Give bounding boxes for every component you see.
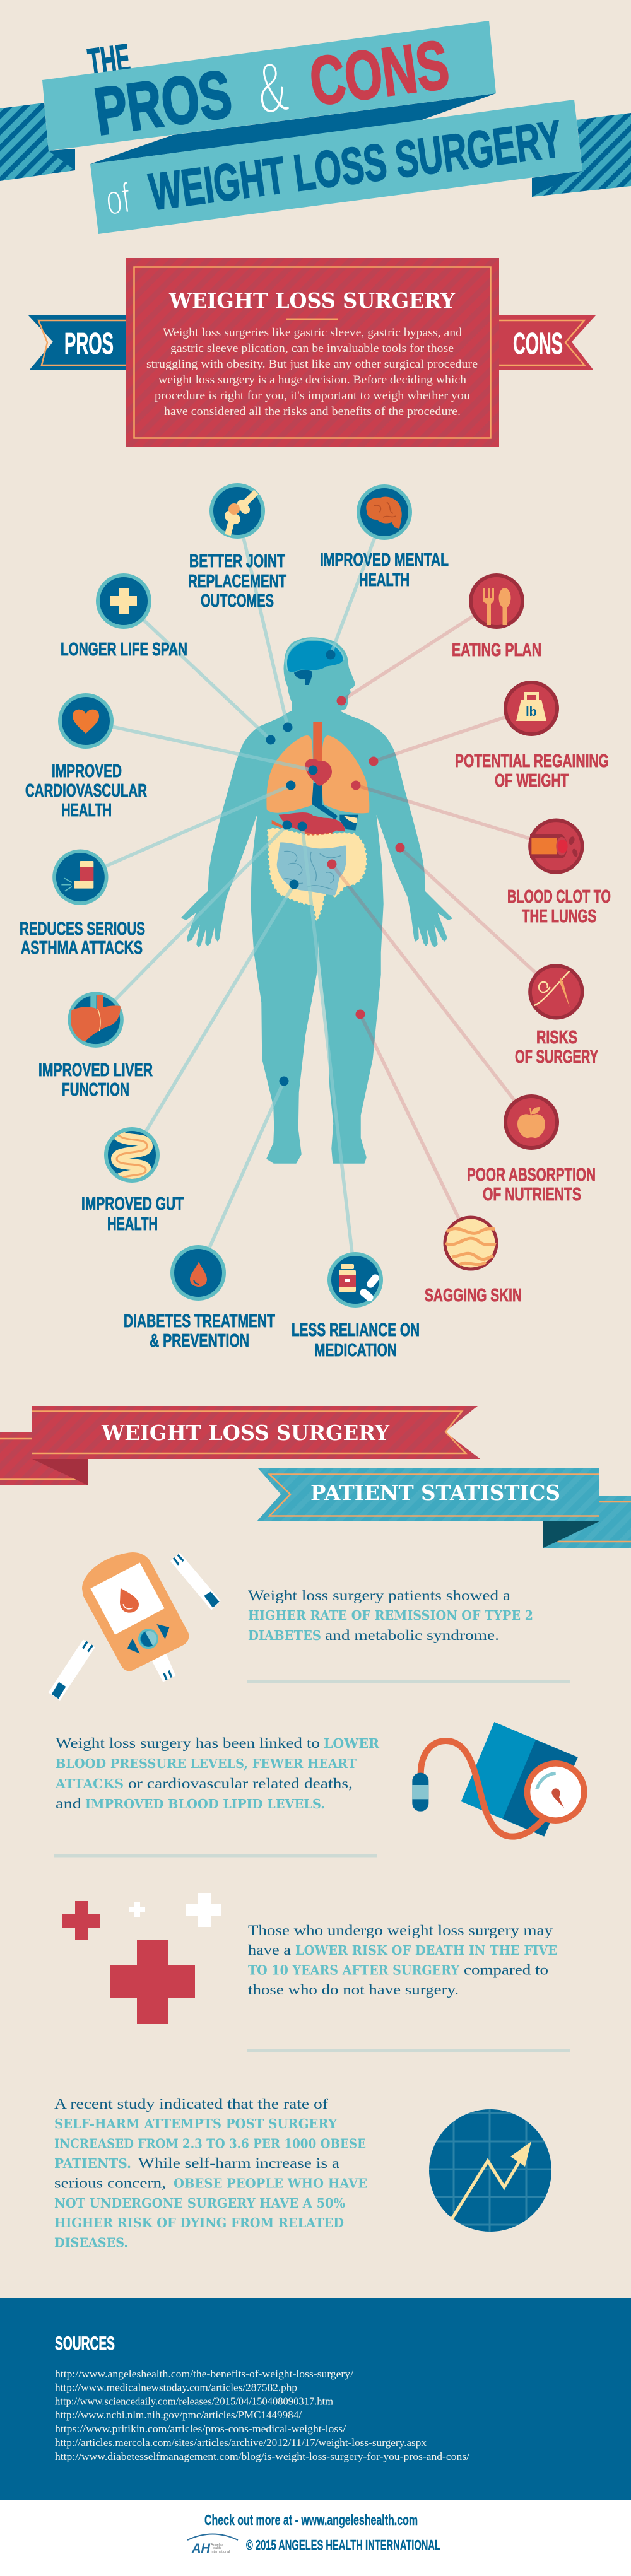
text: self-harm: While self-harm increase is a — [138, 2155, 339, 2171]
label: diabetes: DIABETES TREATMENT — [124, 1311, 275, 1332]
label: regaining weight — [455, 751, 609, 791]
large intestine — [268, 829, 366, 921]
striped ribbon tail right — [532, 113, 631, 197]
connector lines: pros — [81, 511, 384, 1280]
intro text: Weight loss surgeries like gastric sleeve, gastric bypass, and — [163, 326, 463, 339]
icon: sagging skin — [445, 1217, 497, 1269]
intro text: struggling with obesity. But just like any other surgical procedure — [146, 358, 478, 371]
label: sagging skin: SAGGING SKIN — [425, 1285, 522, 1306]
label: joint: BETTER JOINT — [189, 551, 285, 571]
logo: AH — [191, 2541, 211, 2556]
banner: weight loss surgery: WEIGHT LOSS SURGERY — [101, 1420, 389, 1445]
label: blood clot: THE LUNGS — [522, 906, 596, 927]
heading: Cons: CONS — [305, 26, 453, 120]
label: eating plan: EATING PLAN — [452, 640, 541, 660]
sources list: http://www.ncbi.nlm.nih.gov/pmc/articles/PMC1449984/ — [55, 2409, 302, 2421]
icon: blood drop — [172, 1247, 224, 1299]
text: remission — [248, 1588, 533, 1643]
text: risk of death: LOWER RISK OF DEATH IN THE FIVE — [295, 1943, 557, 1958]
icon: joint — [211, 485, 263, 537]
icon: apple — [505, 1096, 557, 1148]
top ribbon — [42, 21, 496, 151]
text: blood pressure: Weight loss surgery has been linked to — [56, 1735, 320, 1751]
banner: weight loss surgery — [0, 1406, 480, 1485]
label: liver: IMPROVED LIVER — [38, 1060, 153, 1080]
text: self-harm: A recent study indicated that the rate of — [54, 2096, 328, 2112]
text: remission: HIGHER RATE OF REMISSION OF TYPE 2 — [248, 1608, 533, 1623]
labels: pros — [20, 550, 449, 1361]
label: regaining weight: OF WEIGHT — [495, 771, 569, 791]
icon: blood pressure cuff — [412, 1722, 587, 1837]
icon: medical cross — [98, 575, 150, 627]
sources list: http://www.sciencedaily.com/releases/2015/04/150408090317.htm — [55, 2396, 333, 2408]
label: cardiovascular: IMPROVED — [52, 761, 122, 782]
sources list: http://www.diabetesselfmanagement.com/blog/is-weight-loss-surgery-for-you-pros-and-cons/ — [55, 2450, 469, 2462]
text: remission: Weight loss surgery patients showed a — [248, 1588, 510, 1603]
label: liver: FUNCTION — [62, 1080, 129, 1100]
logo: Health — [211, 2546, 221, 2550]
icon: brain — [358, 486, 410, 538]
heading: Pros: PROS — [90, 57, 236, 149]
text: risk of death: Those who undergo weight loss surgery may — [248, 1923, 553, 1938]
logo: Angeles — [211, 2543, 223, 2547]
icon: gut — [106, 1129, 158, 1181]
label: mental health — [320, 550, 449, 590]
pros ribbon — [28, 315, 127, 370]
banner: patient statistics — [257, 1468, 631, 1548]
label: diabetes — [124, 1311, 275, 1351]
label: risks — [515, 1027, 598, 1067]
label: joint: OUTCOMES — [201, 591, 274, 611]
text: blood pressure: and — [56, 1796, 82, 1812]
text: self-harm: DISEASES. — [54, 2235, 128, 2251]
icon: weight — [505, 682, 557, 734]
intro text — [146, 326, 478, 418]
trachea — [313, 722, 322, 761]
icon: medication — [329, 1254, 381, 1306]
label: medication — [292, 1320, 420, 1361]
text: blood pressure: BLOOD PRESSURE LEVELS, FEWER HEART — [56, 1756, 357, 1771]
body silhouette — [182, 638, 452, 1163]
vessels — [312, 783, 358, 831]
copyright: © 2015 ANGELES HEALTH INTERNATIONAL — [246, 2537, 440, 2553]
text: self-harm: PATIENTS. — [54, 2156, 131, 2171]
label: medication: MEDICATION — [314, 1340, 397, 1361]
sources list: http://articles.mercola.com/sites/articles/archive/2012/11/17/weight-loss-surgery.aspx — [55, 2437, 427, 2449]
sources heading: SOURCES — [55, 2333, 115, 2354]
label: blood clot — [507, 887, 611, 927]
label: mental health: HEALTH — [359, 570, 410, 590]
text: self-harm: serious concern, — [54, 2175, 166, 2191]
label: medication: LESS RELIANCE ON — [292, 1320, 420, 1340]
heading: ampersand: & — [252, 46, 293, 130]
cons ribbon: CONS — [513, 327, 563, 361]
label: life span: LONGER LIFE SPAN — [61, 640, 187, 660]
logo — [187, 2534, 238, 2556]
icon: rising chart — [426, 2107, 555, 2233]
small intestine — [278, 843, 346, 894]
text: blood pressure: LOWER — [324, 1736, 380, 1751]
text: self-harm: NOT UNDERGONE SURGERY HAVE A 50% — [54, 2196, 345, 2211]
banner: patient statistics: PATIENT STATISTICS — [310, 1480, 560, 1505]
label: asthma: REDUCES SERIOUS — [20, 919, 145, 939]
text: self-harm: HIGHER RISK OF DYING FROM RELATED — [54, 2215, 344, 2230]
footer link: Check out more at - www.angeleshealth.com — [204, 2512, 418, 2528]
text: blood pressure — [55, 1735, 380, 1812]
dots: cons — [327, 696, 405, 1019]
text: risk of death — [248, 1923, 557, 1998]
label: gut: IMPROVED GUT — [81, 1194, 184, 1214]
label: risks: RISKS — [536, 1027, 577, 1048]
text: risk of death: have a — [248, 1942, 291, 1958]
icon: suture needle — [530, 966, 582, 1018]
internal organs — [266, 639, 369, 921]
icon: fork and spoon — [471, 575, 522, 627]
heading: The: THE — [85, 35, 133, 86]
connector lines: cons — [332, 601, 556, 1243]
ribbon fold — [90, 93, 496, 164]
text: remission: and metabolic syndrome. — [325, 1627, 499, 1643]
striped ribbon tail left — [0, 103, 75, 181]
label: cardiovascular — [25, 761, 147, 821]
dots: pros — [266, 650, 336, 1086]
text: risk of death: those who do not have surgery. — [248, 1982, 459, 1998]
label: nutrients — [467, 1165, 596, 1205]
label: cardiovascular: HEALTH — [61, 800, 112, 821]
intro text: procedure is right for you, it's important to weigh whether you — [155, 389, 471, 402]
intro heading: WEIGHT LOSS SURGERY — [168, 288, 455, 313]
icon: glucose meter — [49, 1552, 221, 1701]
sources list — [55, 2368, 469, 2462]
stomach — [272, 820, 333, 836]
pros ribbon: PROS — [64, 327, 114, 361]
text: risk of death: compared to — [464, 1962, 548, 1978]
label: mental health: IMPROVED MENTAL — [320, 550, 449, 570]
label: gut: HEALTH — [107, 1214, 158, 1234]
label: asthma: ASTHMA ATTACKS — [21, 938, 143, 958]
text: blood pressure: ATTACKS — [55, 1776, 124, 1791]
icon: heart — [60, 695, 112, 747]
heading: of: of — [103, 174, 133, 225]
panel: sources — [0, 2298, 631, 2500]
heart — [305, 759, 332, 786]
label: diabetes: & PREVENTION — [150, 1331, 249, 1351]
text: self-harm: OBESE PEOPLE WHO HAVE — [174, 2176, 367, 2191]
text: risk of death: TO 10 YEARS AFTER SURGERY — [248, 1963, 459, 1978]
brain — [286, 639, 343, 685]
sources list: http://www.medicalnewstoday.com/articles/287582.php — [55, 2382, 297, 2394]
panel: intro — [126, 258, 499, 447]
footer — [0, 2500, 631, 2576]
labels: cons — [425, 640, 611, 1306]
label: cardiovascular: CARDIOVASCULAR — [25, 781, 147, 801]
label: gut — [81, 1194, 184, 1234]
human body figure — [182, 638, 452, 1163]
label: joint: REPLACEMENT — [188, 571, 286, 592]
bottom ribbon — [90, 100, 582, 234]
logo: International — [211, 2550, 230, 2554]
text: self-harm — [54, 2096, 367, 2251]
text: remission: DIABETES — [248, 1628, 321, 1643]
label: joint — [188, 551, 286, 611]
icon: inhaler — [54, 851, 107, 903]
label: liver — [38, 1060, 153, 1100]
text: blood pressure: IMPROVED BLOOD LIPID LEVELS. — [85, 1796, 325, 1812]
label: asthma — [20, 919, 145, 958]
lungs — [266, 735, 369, 813]
title banner — [0, 21, 631, 234]
cons ribbon — [498, 315, 596, 370]
sources list: https://www.pritikin.com/articles/pros-cons-medical-weight-loss/ — [55, 2423, 346, 2435]
intro text: weight loss surgery is a huge decision. Before deciding which — [158, 373, 467, 387]
intro text: gastric sleeve plication, can be invaluable tools for those — [170, 342, 454, 355]
intro text: have considered all the risks and benefits of the procedure. — [164, 405, 461, 418]
icon: weight: lb — [526, 705, 537, 719]
sources list: http://www.angeleshealth.com/the-benefits-of-weight-loss-surgery/ — [55, 2368, 353, 2380]
icon: liver — [69, 993, 122, 1046]
text: self-harm: SELF-HARM ATTEMPTS POST SURGERY — [54, 2116, 337, 2131]
text: self-harm: INCREASED FROM 2.3 TO 3.6 PER 1000 OBESE — [54, 2136, 366, 2151]
text: blood pressure: or cardiovascular related deaths, — [128, 1776, 353, 1791]
icon: medical crosses — [62, 1893, 221, 2024]
icon: blood clot — [530, 820, 582, 872]
label: nutrients: OF NUTRIENTS — [483, 1185, 581, 1205]
